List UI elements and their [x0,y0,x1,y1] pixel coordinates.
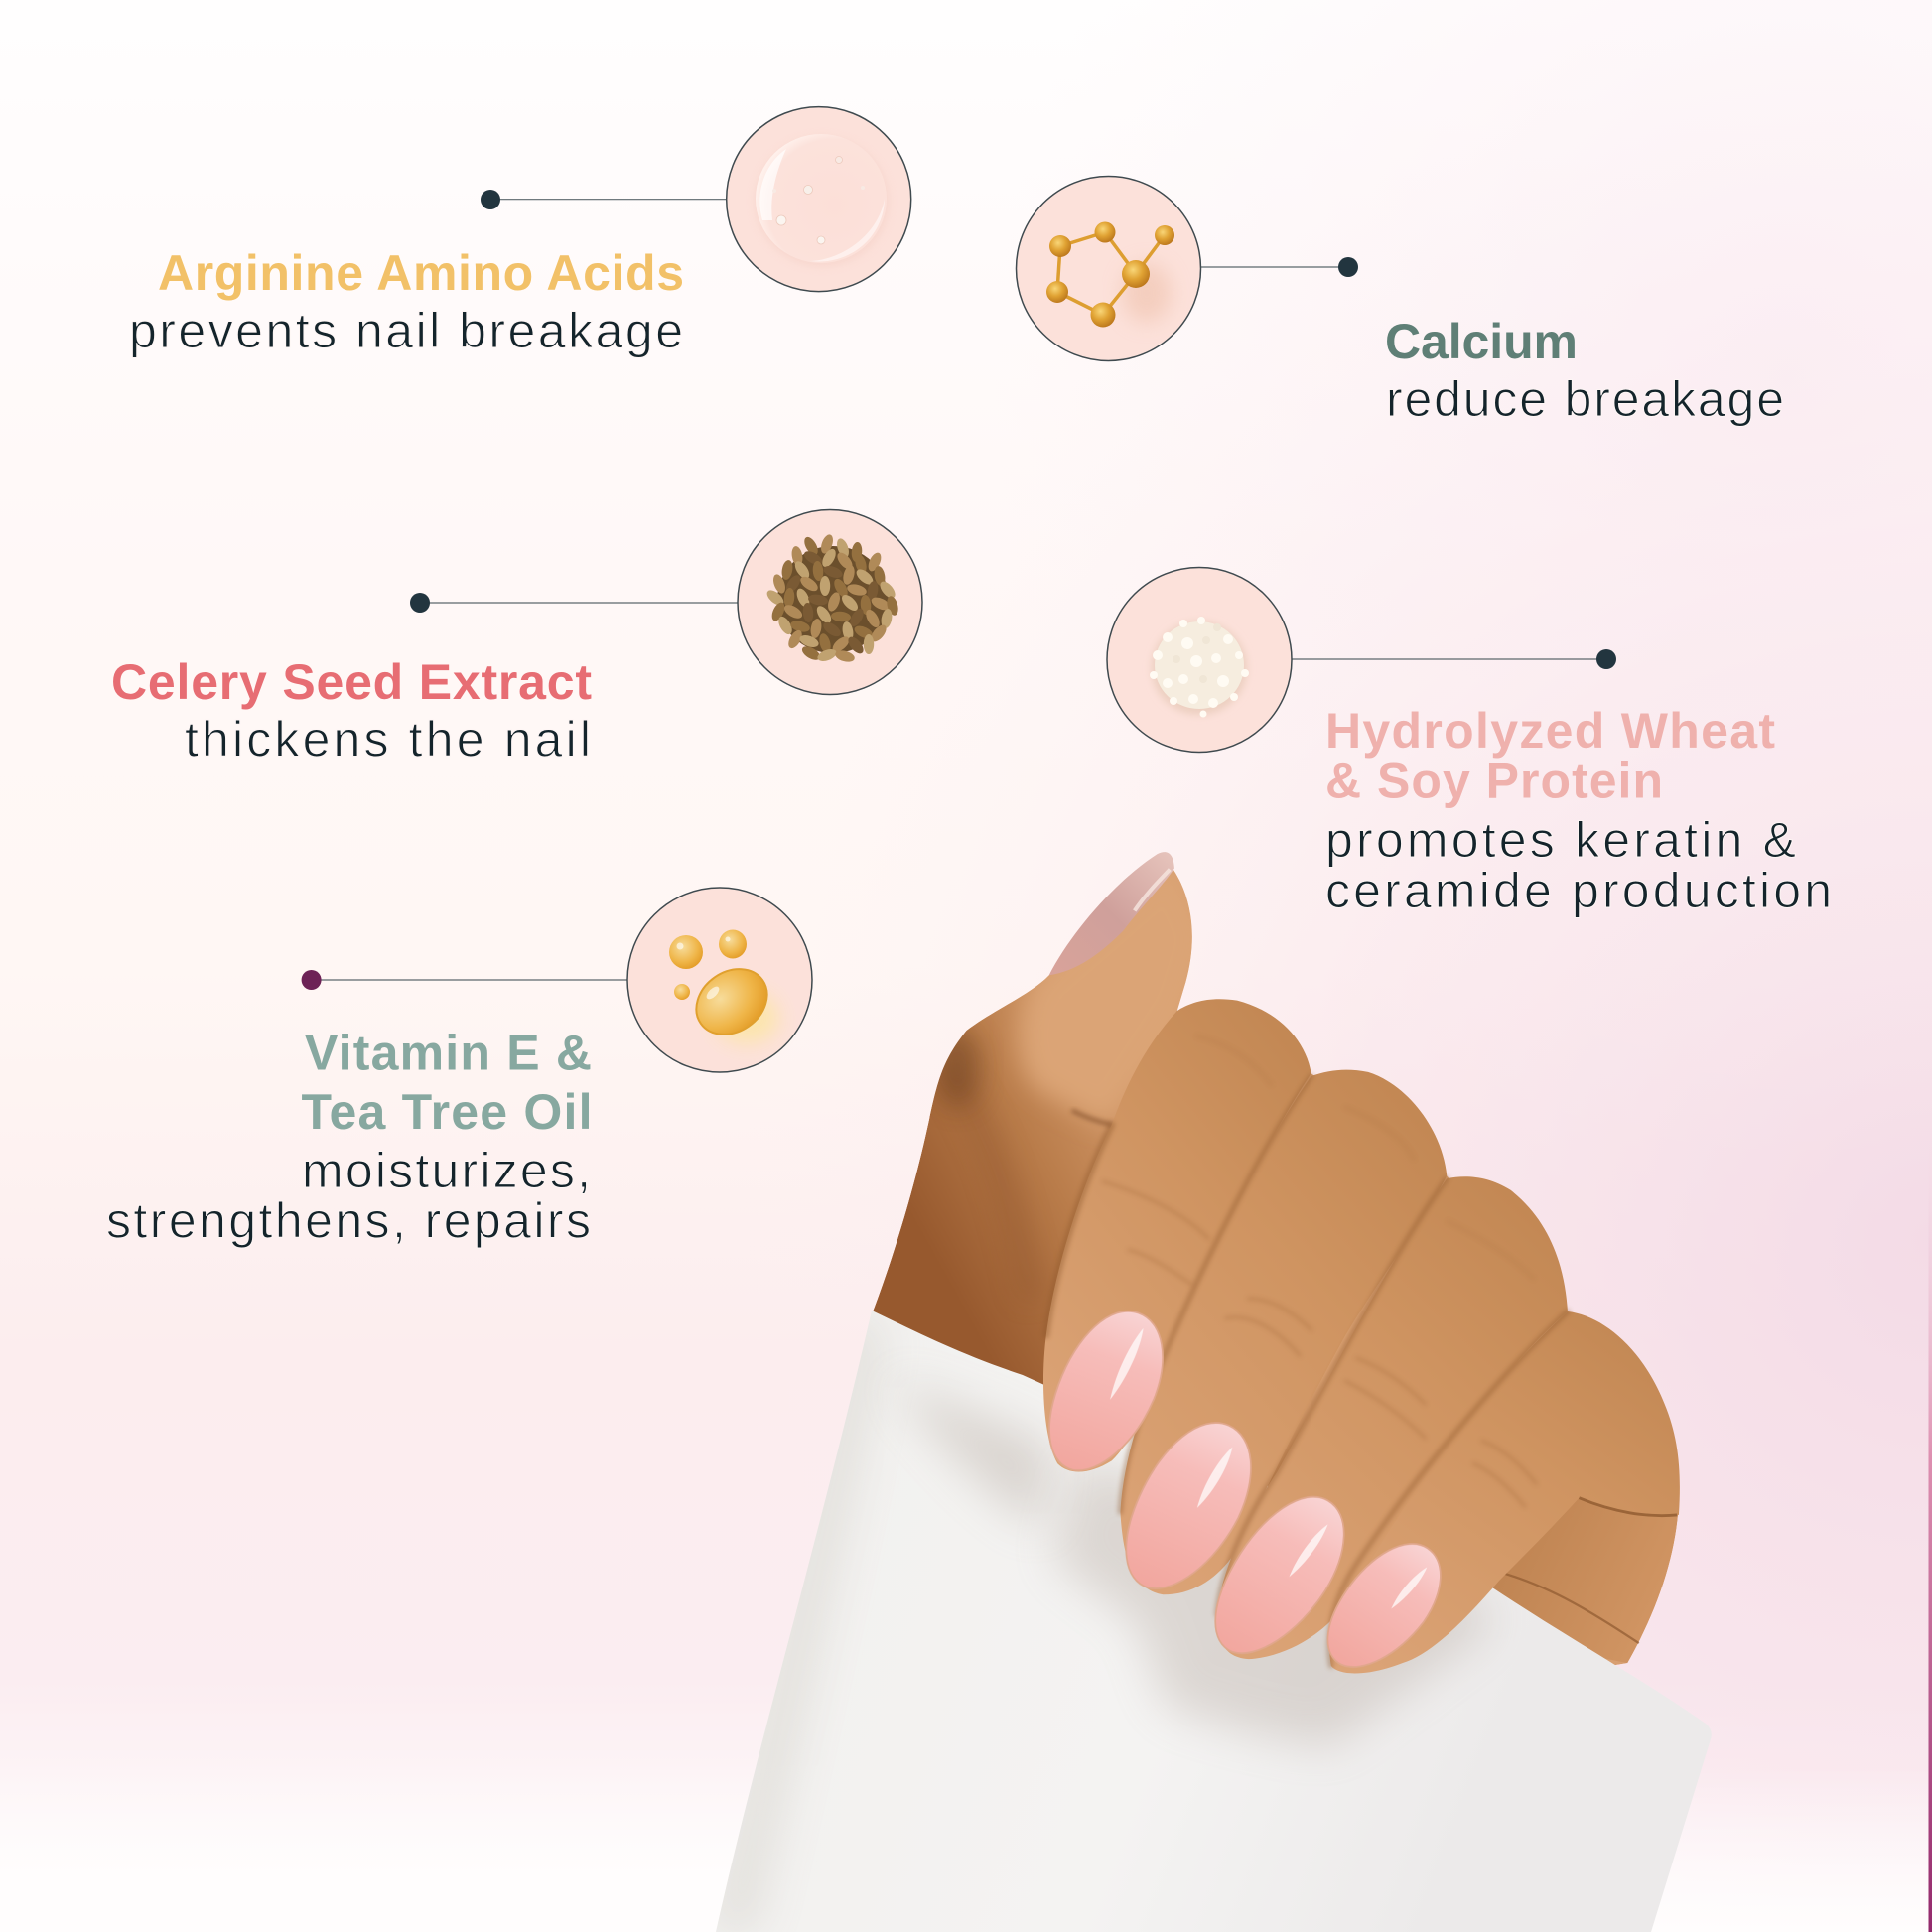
pinky crease [1579,1498,1677,1516]
right edge accent strip [1928,1142,1932,1932]
label: Hydrolyzed Wheat [1325,703,1775,759]
description [106,1143,591,1249]
fingers and nails [1033,999,1680,1690]
label: & Soy Protein [1325,753,1663,808]
label: Tea Tree Oil [302,1084,592,1140]
ring finger [1217,1176,1568,1659]
knuckle creases [1103,1036,1536,1506]
nail 2 [1107,1404,1271,1610]
description: ceramide production [1325,863,1832,918]
icon: white protein powder [1107,568,1292,753]
description: thickens the nail [185,711,591,766]
leader line and dot [1200,257,1358,277]
icon: gold molecule [1017,177,1201,361]
description: promotes keratin & [1325,812,1796,868]
ingredient: celery seed extract [111,510,922,766]
ingredient: vitamin e and tea tree oil [106,888,812,1249]
leader line and dot [302,970,628,990]
hand back and thumb [873,852,1679,1689]
white sleeve [695,1291,1737,1932]
description: moisturizes, [302,1143,591,1198]
description: prevents nail breakage [129,303,683,358]
label [1325,703,1775,808]
nail 3 [1195,1475,1365,1677]
middle finger [1120,1070,1447,1594]
icon: clear gel drop [727,107,911,292]
icon: golden oil drops [627,888,812,1072]
leader line and dot [410,593,738,613]
leader line and dot [1292,649,1616,669]
label [302,1025,592,1140]
pinky finger [1329,1311,1680,1673]
label: Celery Seed Extract [111,654,592,710]
index finger [1043,999,1311,1472]
hand holding sleeve [695,852,1737,1932]
leader line and dot [481,190,727,209]
ingredient: hydrolyzed wheat and soy protein [1107,568,1832,918]
description: reduce breakage [1386,371,1784,427]
ingredient: calcium [1017,177,1784,427]
nail 1 [1033,1296,1179,1488]
description: strengthens, repairs [106,1193,591,1249]
ingredient: arginine amino acids [129,107,911,358]
label: Vitamin E & [305,1025,592,1080]
description [1325,812,1832,918]
nail 4 [1311,1524,1459,1690]
icon: celery seeds [738,510,922,695]
finger shadows [1046,1076,1568,1666]
label: Arginine Amino Acids [158,245,684,301]
label: Calcium [1385,314,1578,369]
